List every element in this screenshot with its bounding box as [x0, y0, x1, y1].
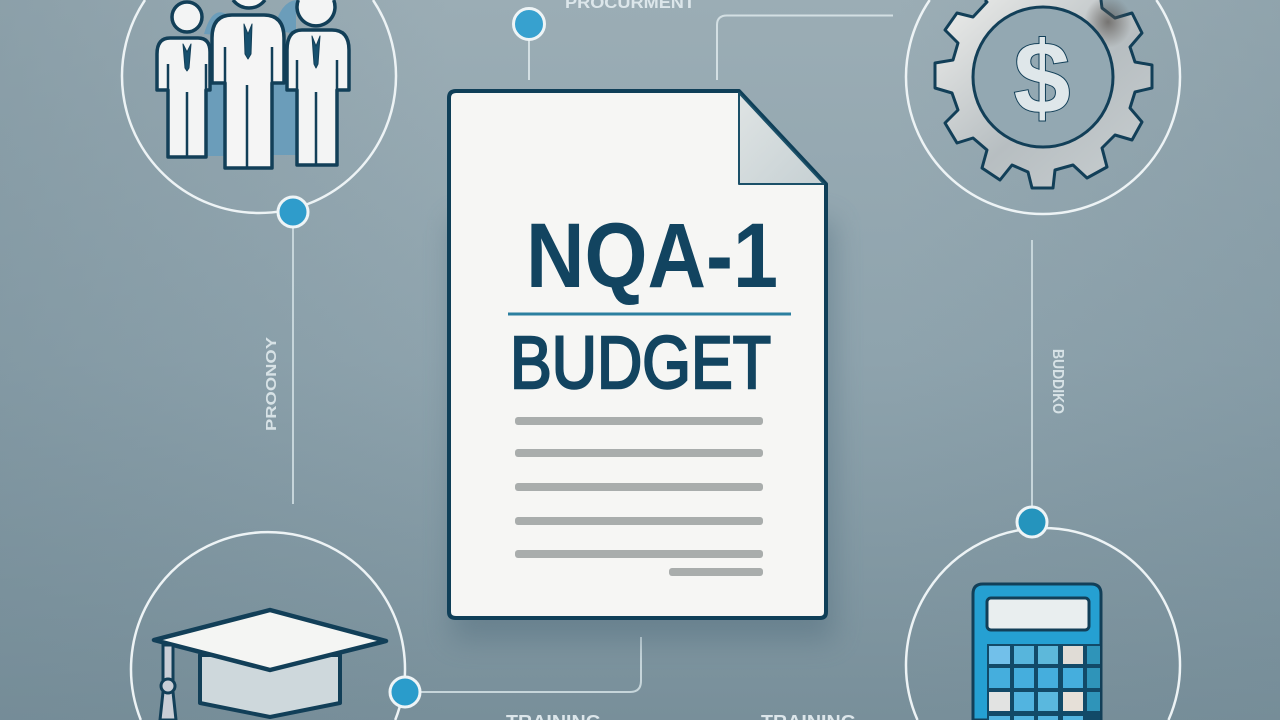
calculator ring — [906, 528, 1180, 720]
panel: cost gear — [906, 0, 1180, 214]
team ring — [122, 0, 396, 213]
panel: team — [122, 0, 396, 227]
gear icon — [935, 0, 1152, 188]
document shadow — [452, 220, 834, 640]
team node — [278, 197, 308, 227]
cap node — [390, 677, 420, 707]
connector: people to document — [292, 226, 294, 504]
cap board — [154, 610, 386, 670]
cap base — [200, 655, 340, 717]
panel: budget document — [449, 91, 826, 618]
gear ring — [906, 0, 1180, 214]
panel: calculator — [906, 507, 1180, 720]
calculator keypad — [987, 644, 1100, 720]
page fold — [739, 93, 824, 184]
calculator body — [973, 584, 1101, 720]
heading: NQA-1: NQA-1 — [526, 205, 778, 307]
label: right vertical: BUDDIKO — [1049, 349, 1066, 414]
tassel — [160, 645, 176, 720]
document page — [449, 91, 826, 618]
procurement node — [514, 8, 544, 40]
person right — [287, 0, 349, 165]
connector: cap to document — [420, 637, 641, 692]
person center — [212, 0, 284, 168]
cap ring — [131, 532, 405, 720]
connector: document to gear — [717, 16, 893, 80]
dollar sign: $ — [1014, 21, 1070, 135]
blue backdrop — [204, 0, 297, 156]
label: left vertical: PROONOY — [263, 337, 280, 431]
calculator node — [1017, 507, 1047, 537]
connector: gear to calculator — [1031, 240, 1033, 508]
connector: procurement dot to document — [528, 38, 530, 80]
placeholder text lines — [515, 417, 763, 576]
heading rule — [508, 312, 791, 316]
panel: training cap — [131, 532, 420, 720]
calculator screen — [987, 598, 1089, 630]
heading: budget: BUDGET — [510, 321, 771, 404]
person left — [157, 2, 210, 157]
